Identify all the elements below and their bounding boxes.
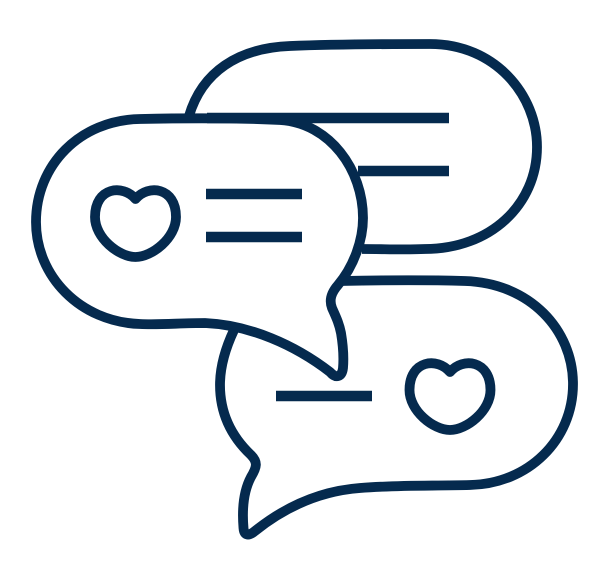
text lines [206,194,302,237]
icon: heart [410,363,490,430]
text line [276,391,372,401]
icon: heart [95,190,176,257]
speech bubble: top right [189,44,537,249]
speech bubble: bottom right [220,280,573,535]
speech bubble: left [36,118,363,376]
